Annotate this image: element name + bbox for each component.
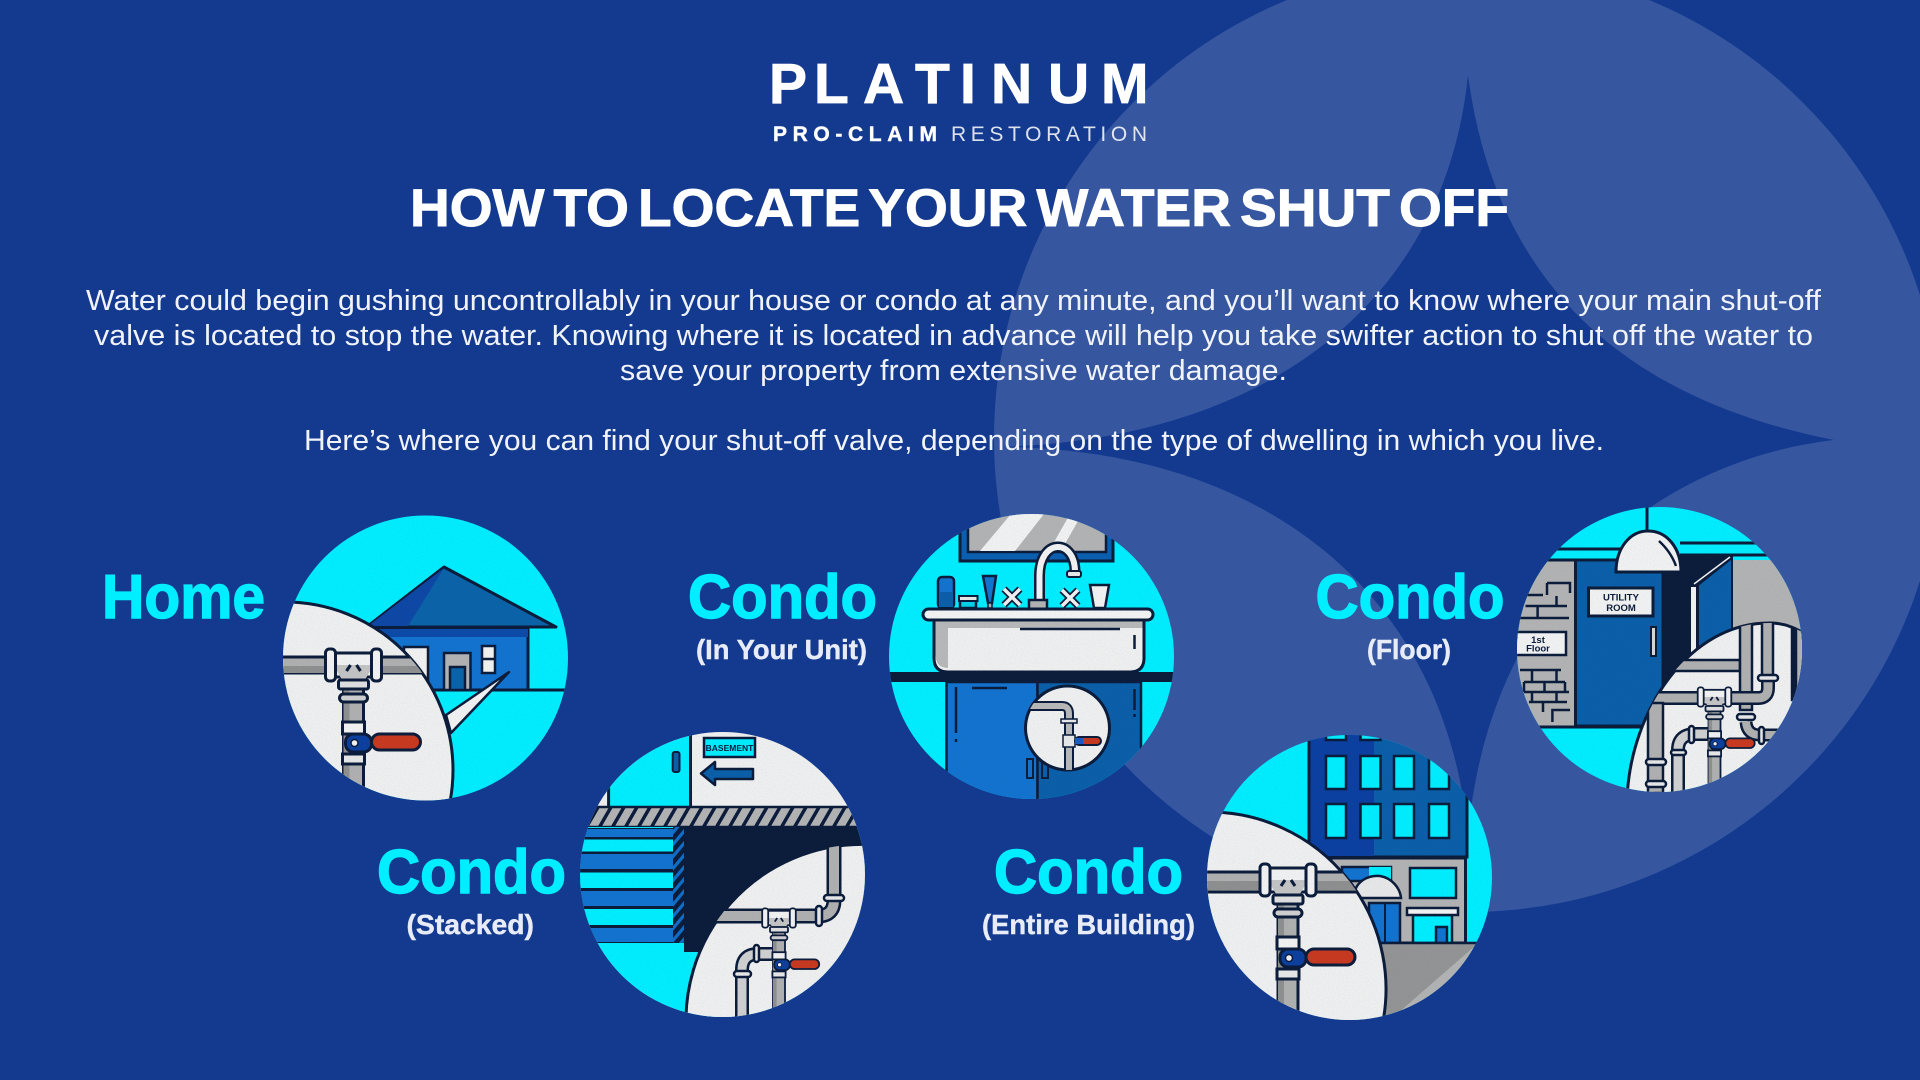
label: Condo floor (1316, 563, 1504, 665)
title: HOW TO LOCATE YOUR WATER SHUT OFF (410, 179, 1509, 238)
label: Condo entire building (982, 838, 1195, 940)
label: Condo entire building: (Entire Building) (982, 909, 1195, 940)
label: Condo floor: (Floor) (1367, 634, 1451, 665)
logo (769, 52, 1148, 146)
icon: left arrow (701, 762, 753, 785)
sign: utility room: UTILITY (1603, 592, 1640, 604)
label: Condo floor: Condo (1316, 563, 1504, 632)
illustration: sink (889, 514, 1174, 799)
logo wordmark: PLATINUM (769, 52, 1148, 116)
illustration: apartment building (1207, 735, 1492, 1020)
sign: basement (704, 738, 755, 757)
intro paragraph: save your property from extensive water damage. (620, 355, 1287, 387)
label: Condo in your unit: Condo (688, 563, 877, 632)
intro paragraph: valve is located to stop the water. Knowing where it is located in advance will help you take swifter action to shut off the water to (94, 320, 1813, 352)
sign: 1st floor: 1st (1531, 635, 1546, 646)
label: Condo in your unit: (In Your Unit) (696, 634, 867, 665)
label: Condo entire building: Condo (994, 838, 1183, 907)
label: Condo stacked: (Stacked) (406, 909, 534, 940)
label: Condo stacked (377, 838, 566, 940)
illustration: utility room floor (1517, 507, 1802, 792)
watermark: circle with four-point star (994, 0, 1920, 912)
sign: utility room: ROOM (1606, 603, 1636, 614)
illustration: home (283, 516, 568, 800)
sign: basement: BASEMENT (706, 743, 754, 753)
film grain over illustrations (283, 507, 1802, 1020)
logo tagline bold: PRO-CLAIM (773, 123, 937, 146)
label: Condo in your unit (688, 563, 877, 665)
sign: 1st floor: Floor (1526, 644, 1550, 654)
label: Home: Home (102, 563, 265, 632)
logo tagline light: RESTORATION (951, 123, 1147, 146)
intro paragraph: Water could begin gushing uncontrollably in your house or condo at any minute, and you’ll want to know where your main shut-off (86, 285, 1822, 317)
label: Condo stacked: Condo (377, 838, 566, 907)
sign: utility room (1588, 588, 1653, 616)
sign: 1st floor (1505, 632, 1566, 655)
intro second paragraph: Here’s where you can find your shut-off valve, depending on the type of dwelling in which you live. (304, 425, 1604, 457)
illustration: basement stack (580, 732, 865, 1017)
intro paragraph (86, 285, 1822, 387)
